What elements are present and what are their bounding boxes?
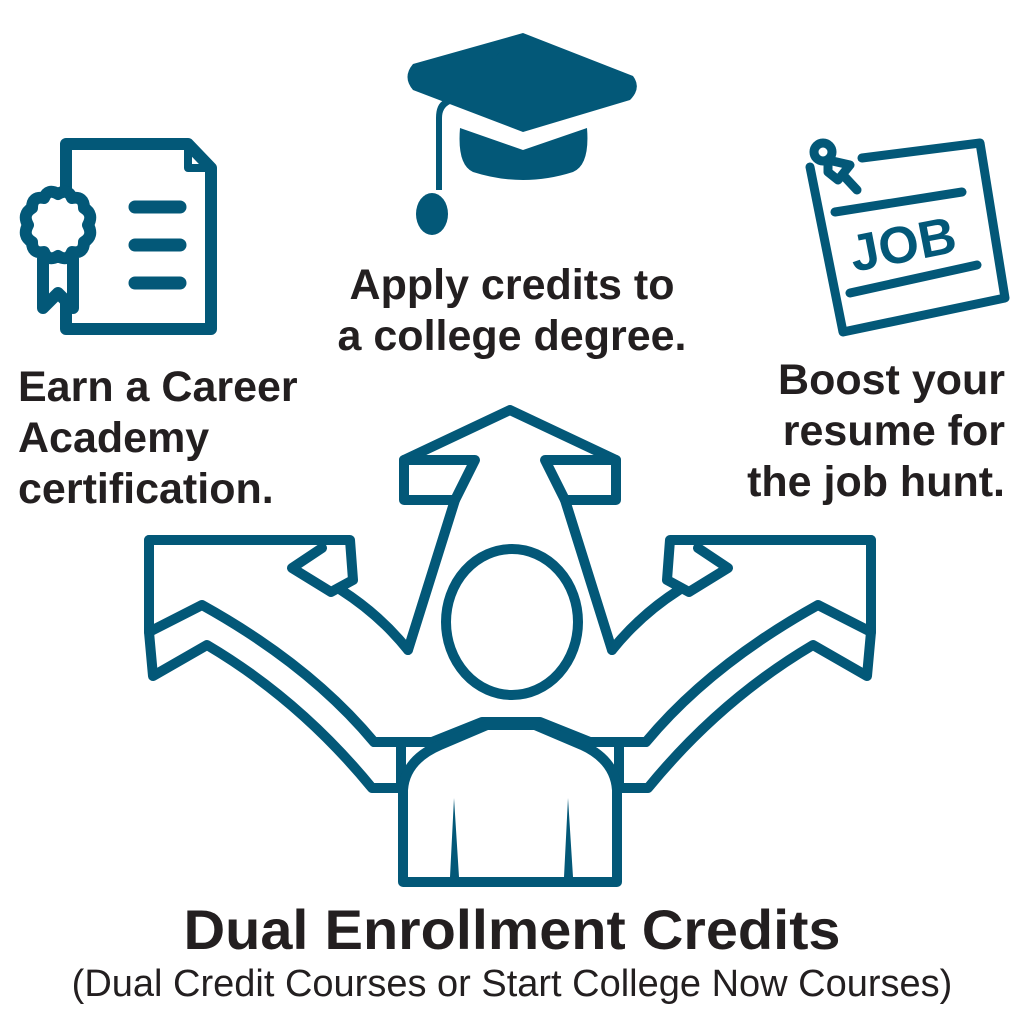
title: Dual Enrollment Credits	[183, 898, 840, 961]
icon: job note	[810, 143, 1005, 332]
text: resume	[747, 356, 1005, 506]
icon: graduation cap	[408, 33, 637, 235]
text: career academy	[18, 363, 298, 513]
left arrow	[149, 540, 353, 592]
text: college degree	[338, 261, 686, 360]
text: career academy: Earn a Career	[18, 363, 298, 411]
center figure: arrows and person	[149, 410, 871, 882]
head	[446, 549, 578, 695]
top arrow	[404, 410, 616, 650]
icon: job note: JOB	[845, 206, 961, 284]
body	[432, 722, 590, 742]
text: college degree: a college degree.	[338, 312, 686, 360]
subtitle: (Dual Credit Courses or Start College Now Courses)	[72, 963, 952, 1005]
text: college degree: Apply credits to	[350, 261, 674, 309]
right arrow	[667, 540, 871, 592]
text: resume: the job hunt.	[747, 458, 1005, 506]
text: career academy: certification.	[18, 465, 274, 513]
text: career academy: Academy	[18, 414, 209, 462]
text: resume: resume for	[783, 407, 1005, 455]
icon: certificate	[26, 144, 211, 329]
text: resume: Boost your	[778, 356, 1005, 404]
body pleats	[450, 798, 573, 877]
